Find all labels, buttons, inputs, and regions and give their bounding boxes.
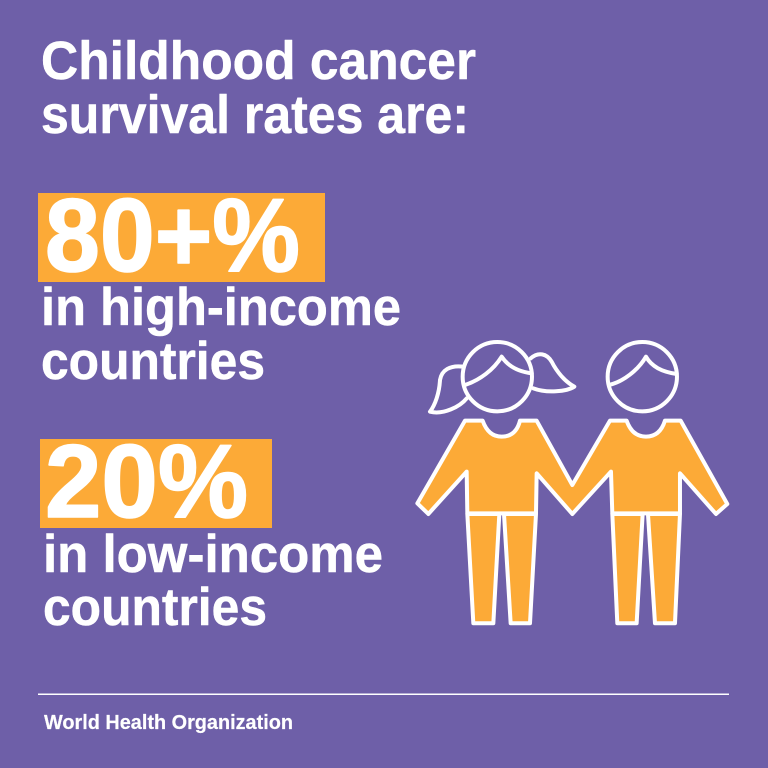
stat: low-income countries: in low-income [43,525,383,584]
stat: low-income countries [40,424,383,637]
stat: high-income countries [38,178,401,391]
title: survival rates are: [41,85,469,145]
stat: high-income countries: in high-income [41,278,401,337]
stat: high-income countries: 80+% [45,178,300,294]
footer: organization name: World Health Organization [44,712,293,734]
stat: high-income countries: countries [41,332,265,391]
title: Childhood cancer [41,31,476,91]
stat: low-income countries: countries [43,578,267,637]
icon: two children holding hands [417,342,727,623]
stat: low-income countries: 20% [45,424,248,540]
title [41,31,476,145]
footer rule [38,694,729,695]
